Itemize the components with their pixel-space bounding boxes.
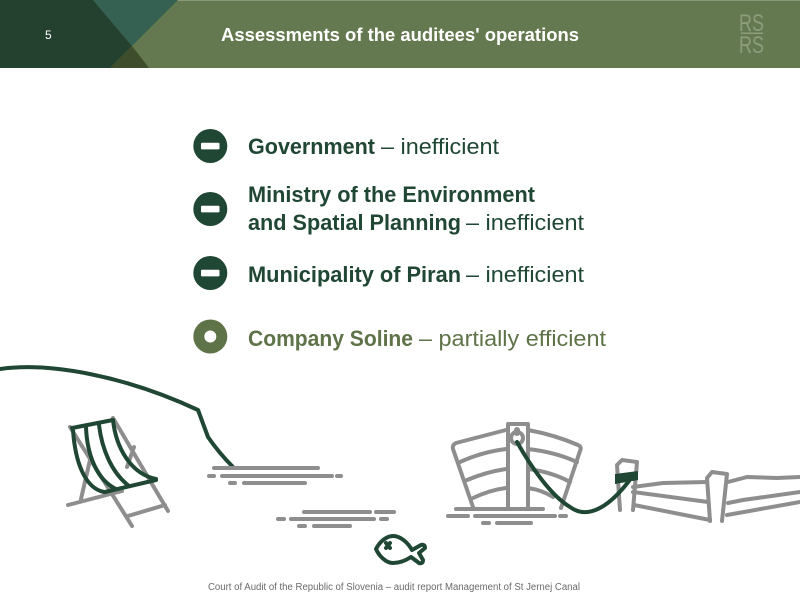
label: Government inefficient: Government — [248, 134, 376, 159]
label: Company Soline partially efficient — [248, 326, 606, 351]
page number: 5 — [45, 28, 52, 42]
label: Municipality inefficient — [248, 262, 584, 287]
label: Company Soline partially efficient: – partially efficient — [419, 326, 606, 351]
icon: fish — [376, 536, 425, 563]
label: Municipality inefficient: Municipality of Piran — [248, 262, 461, 287]
water ripples — [209, 468, 566, 526]
header band — [0, 0, 800, 68]
label: Ministry inefficient: Ministry of the Environment — [248, 182, 536, 207]
footer: Court of Audit of the Republic of Slovenia – audit report Management of St Jernej Canal — [208, 582, 580, 593]
icon: minus — [193, 129, 227, 163]
assessment: Government — [193, 129, 499, 163]
icon: boat — [453, 424, 581, 508]
label: Government inefficient — [248, 134, 499, 159]
label: Ministry inefficient: and Spatial Planning — [248, 210, 461, 235]
icon: minus — [193, 192, 227, 226]
label: Government inefficient: – inefficient — [381, 134, 499, 159]
icon: dot — [193, 320, 227, 354]
icon: minus — [193, 256, 227, 290]
logo: RS/RS: RS — [739, 32, 764, 59]
shoreline — [0, 367, 233, 467]
icon: mooring post — [617, 460, 637, 510]
label: Municipality inefficient: – inefficient — [466, 262, 584, 287]
icon: deck chair — [68, 418, 168, 526]
icon: fence — [633, 472, 800, 521]
logo: RS/RS: RS — [739, 10, 764, 37]
label: Ministry inefficient — [248, 182, 584, 235]
assessment: Ministry — [193, 182, 584, 235]
assessment: Company Soline — [193, 320, 606, 354]
logo: RS/RS — [739, 10, 764, 59]
rope — [517, 442, 638, 512]
title: Assessments of the auditees' operations — [221, 25, 579, 45]
label: Ministry inefficient: – inefficient — [466, 210, 584, 235]
label: Company Soline partially efficient: Company Soline — [248, 326, 413, 351]
assessment: Municipality of Piran — [193, 256, 584, 290]
